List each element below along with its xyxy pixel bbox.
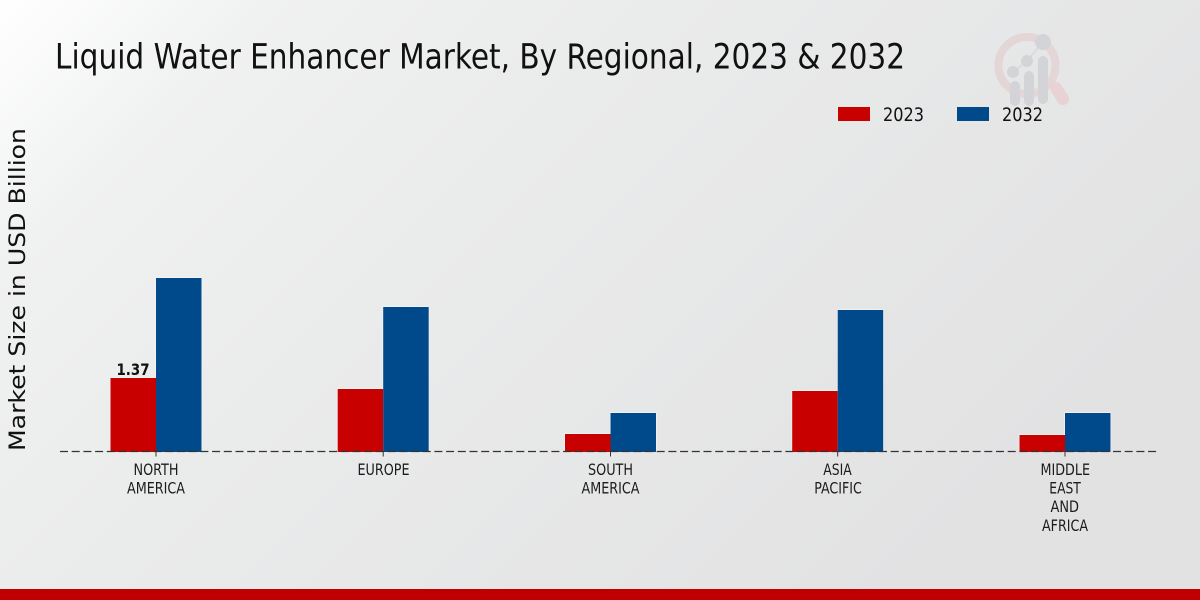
label: South America: SOUTH [588,460,633,479]
label: South America [582,460,640,497]
bar chart [60,278,1159,456]
axis baseline [60,450,1159,452]
category labels [127,460,1090,535]
label: Middle East and Africa: AND [1050,497,1079,516]
title: Liquid Water Enhancer Market, By Regional, 2023 & 2032 [55,37,905,77]
legend item: 2032: 2032 [1002,105,1043,126]
label: Europe: EUROPE [358,460,410,479]
bar edge highlights [110,278,1110,452]
footer bar [0,589,1200,600]
axis ticks [156,452,1065,456]
label: North America: NORTH [134,460,178,479]
icon: watermark logo [998,34,1063,106]
label: Middle East and Africa: AFRICA [1042,516,1088,535]
bars: South America [565,413,656,452]
bars: Asia Pacific [792,310,883,452]
bars: Europe [338,307,429,452]
label: Asia Pacific [814,460,862,497]
bars: North America [110,278,202,452]
legend item: 2023 [838,105,924,126]
label: North America: AMERICA [127,478,185,497]
legend [838,105,1043,126]
legend item: 2023: 2023 [883,105,924,126]
value label: 1.37 [116,360,150,379]
y axis label: Market Size in USD Billion [5,128,31,451]
label: South America: AMERICA [582,478,640,497]
label: North America [127,460,185,497]
label: Asia Pacific: PACIFIC [814,478,862,497]
bars: Middle East and Africa [1020,413,1110,452]
label: Middle East and Africa [1040,460,1090,535]
legend item: 2032 [957,105,1043,126]
label: Middle East and Africa: EAST [1049,478,1081,497]
label: Middle East and Africa: MIDDLE [1040,460,1090,479]
label: Asia Pacific: ASIA [823,460,852,479]
